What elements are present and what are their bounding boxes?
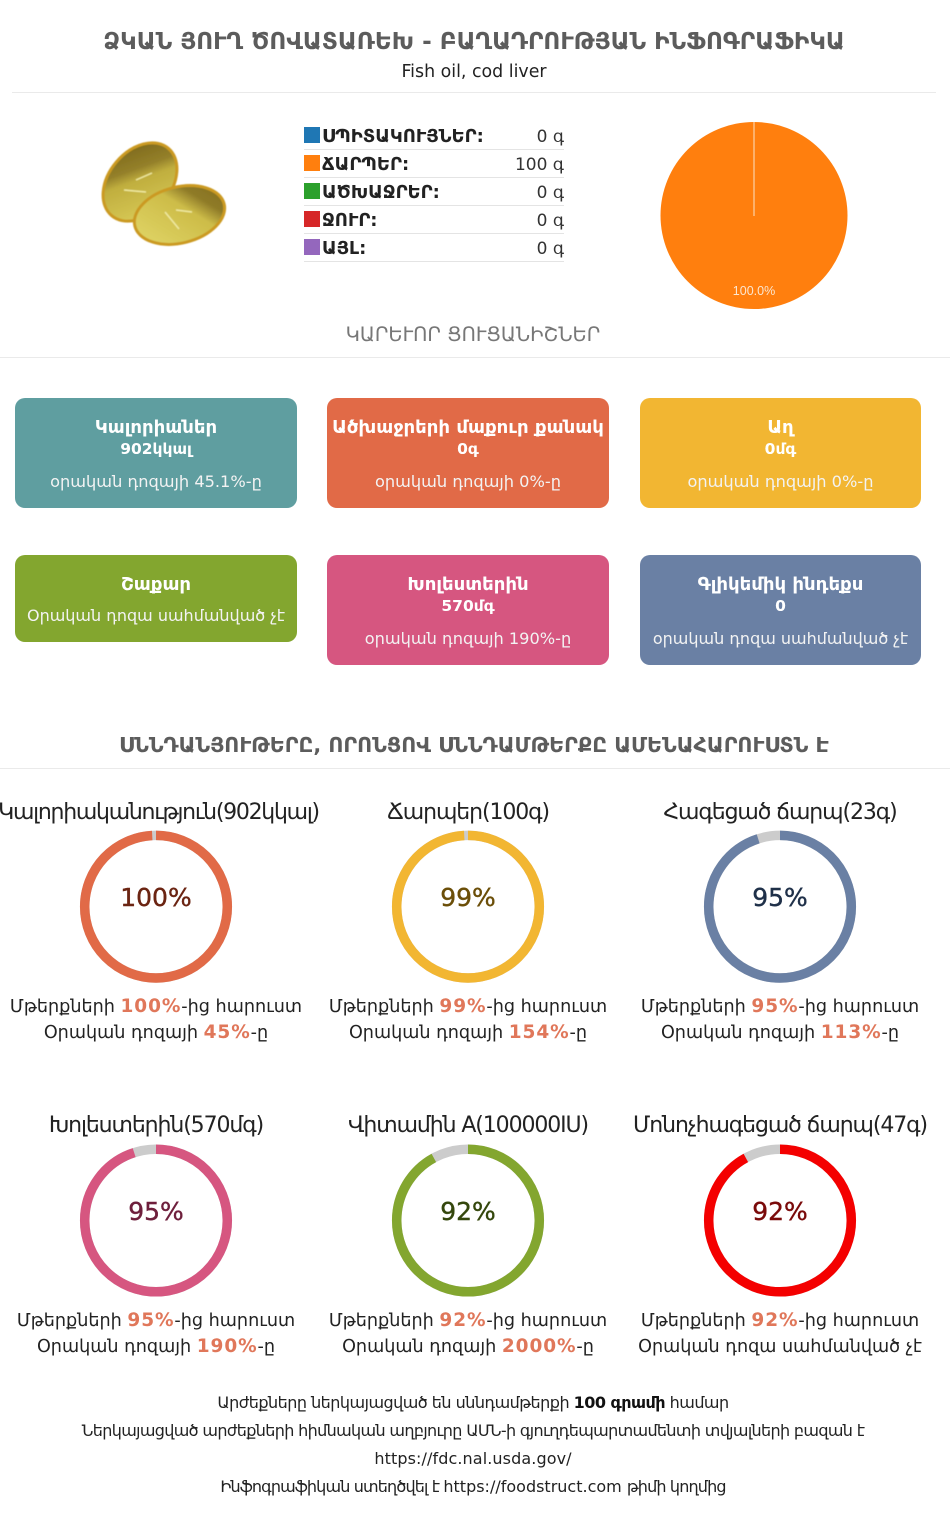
legend row: proteins — [304, 122, 564, 150]
stat text: saturated fat: Մթերքների 95%-ից հարուստ — [641, 996, 919, 1017]
legend row: carbohydrates: ԱԾԽԱՋՐԵՐ: — [322, 182, 440, 203]
card: glycemic index — [640, 555, 921, 665]
card: net carbs: 0գ — [457, 440, 479, 458]
card: cholesterol: 570մգ — [441, 597, 495, 615]
footer line: credit: Ինֆոգրաֆիկան ստեղծվել է https://foodstruct.com թիմի կողմից — [220, 1477, 726, 1496]
ring: saturated fat 95%: 95% — [752, 883, 808, 912]
stat text: saturated fat: Օրական դոզայի 113%-ը — [661, 1022, 899, 1043]
legend row: carbohydrates — [304, 178, 564, 206]
card: sugar: Շաքար — [121, 574, 191, 595]
card: cholesterol: օրական դոզայի 190%-ը — [365, 629, 571, 648]
legend row: water: ՋՈՒՐ: — [322, 210, 378, 231]
ring: saturated fat 95% — [704, 830, 856, 983]
ring: fat 99%: 99% — [440, 883, 496, 912]
label: calorie content: Կալորիականություն(902կկալ) — [0, 800, 319, 825]
stat text: saturated fat — [641, 996, 919, 1043]
ring: cholesterol 95%: 95% — [128, 1197, 184, 1226]
ring: monounsaturated fat 92% — [704, 1144, 856, 1296]
stat text: calories: Օրական դոզայի 45%-ը — [44, 1022, 268, 1043]
heading: nutrient rank: ՍՆՆԴԱՆՅՈՒԹԵՐԸ, ՈՐՈՆՑՈՎ ՍՆՆԴԱՄԹԵՐՔԸ ԱՄԵՆԱՀԱՐՈՒՍՏՆ Է — [119, 733, 829, 757]
card: calories: օրական դոզայի 45.1%-ը — [50, 472, 262, 491]
card: sugar: Օրական դոզա սահմանված չէ — [27, 606, 285, 625]
card: salt: 0մգ — [765, 440, 796, 458]
card: cholesterol — [327, 555, 609, 665]
stat text: calories — [10, 996, 302, 1043]
footer line: data source: Ներկայացված արժեքների հիմնական աղբյուրը ԱՄՆ-ի գյուղդեպարտամենտի տվյալների բազան է — [82, 1421, 864, 1440]
legend row: other: ԱՅԼ: — [322, 238, 366, 259]
legend row: fats: ՃԱՐՊԵՐ: — [322, 154, 409, 175]
ring: monounsaturated fat 92%: 92% — [752, 1197, 808, 1226]
card: sugar — [15, 555, 297, 642]
stat text: fat: Մթերքների 99%-ից հարուստ — [329, 996, 607, 1017]
footer line: per 100 grams: Արժեքները ներկայացված են սննդամթերքի 100 գրամի համար — [217, 1393, 729, 1412]
stat text: calories: Մթերքների 100%-ից հարուստ — [10, 996, 302, 1017]
icon: fish oil capsules — [100, 140, 227, 247]
stat text: cholesterol — [17, 1310, 295, 1357]
card: salt: օրական դոզայի 0%-ը — [688, 472, 873, 491]
heading: key indicators: ԿԱՐԵՒՈՐ ՑՈՒՑԱՆԻՇՆԵՐ — [346, 323, 600, 346]
card: calories: Կալորիաներ — [95, 417, 217, 438]
ring: cholesterol 95% — [80, 1144, 232, 1296]
label: vitamin A: Վիտամին A(100000IU) — [348, 1113, 588, 1138]
legend row: fats — [304, 150, 564, 178]
legend row: other — [304, 234, 564, 262]
stat text: cholesterol: Մթերքների 95%-ից հարուստ — [17, 1310, 295, 1331]
ring: calories 100% — [80, 830, 232, 983]
stat text: monounsaturated fat — [638, 1310, 922, 1357]
card: net carbs: Ածխաջրերի մաքուր քանակ — [332, 417, 604, 438]
legend row: proteins: ՍՊԻՏԱԿՈՒՅՆԵՐ: — [322, 126, 484, 147]
card: glycemic index: 0 — [775, 597, 786, 615]
label: saturated fat: Հագեցած ճարպ(23գ) — [663, 800, 897, 825]
label: monounsaturated fat: Մոնոչհագեցած ճարպ(47գ) — [633, 1113, 927, 1138]
stat text: vitamin A: Մթերքների 92%-ից հարուստ — [329, 1310, 607, 1331]
legend: composition table — [304, 126, 564, 262]
card: calories: 902կկալ — [120, 440, 192, 458]
stat text: fat: Օրական դոզայի 154%-ը — [349, 1022, 587, 1043]
stat text: cholesterol: Օրական դոզայի 190%-ը — [37, 1336, 275, 1357]
pie chart: 100.0% — [733, 284, 775, 298]
stat text: fat — [329, 996, 607, 1043]
card: net carbs — [327, 398, 609, 508]
footer notes — [82, 1393, 865, 1496]
stat text: monounsaturated fat: Օրական դոզա սահմանված չէ — [638, 1337, 922, 1357]
ring: vitamin A 92%: 92% — [440, 1197, 496, 1226]
label: fat: Ճարպեր(100գ) — [387, 800, 549, 825]
pie chart — [660, 122, 848, 309]
legend row: proteins: 0 գ — [537, 127, 564, 147]
card: salt — [640, 398, 921, 508]
legend row: water — [304, 206, 564, 234]
label: cholesterol: Խոլեստերին(570մգ) — [49, 1113, 263, 1138]
legend row: water: 0 գ — [537, 211, 564, 231]
subtitle: Fish oil, cod liver — [401, 62, 547, 82]
legend row: fats: 100 գ — [515, 155, 564, 175]
card: cholesterol: Խոլեստերին — [407, 574, 529, 595]
card: salt: Աղ — [767, 417, 794, 438]
ring: calories 100%: 100% — [120, 883, 192, 912]
stat text: vitamin A: Օրական դոզայի 2000%-ը — [342, 1336, 594, 1357]
footer line: source url: https://fdc.nal.usda.gov/ — [374, 1449, 572, 1468]
ring: vitamin A 92% — [392, 1144, 544, 1296]
legend row: carbohydrates: 0 գ — [537, 183, 564, 203]
card: net carbs: օրական դոզայի 0%-ը — [375, 472, 561, 491]
ring: fat 99% — [392, 830, 544, 983]
stat text: vitamin A — [329, 1310, 607, 1357]
card: calories — [15, 398, 297, 508]
stat text: monounsaturated fat: Մթերքների 92%-ից հարուստ — [641, 1310, 919, 1331]
title: ՁԿԱՆ ՅՈՒՂ ԾՈՎԱՏԱՌԵԽ - ԲԱՂԱԴՐՈՒԹՅԱՆ ԻՆՖՈԳՐԱՖԻԿԱ — [103, 28, 845, 55]
card: glycemic index: օրական դոզա սահմանված չէ — [653, 629, 908, 648]
legend row: other: 0 գ — [537, 239, 564, 259]
card: glycemic index: Գլիկեմիկ ինդեքս — [698, 574, 863, 595]
